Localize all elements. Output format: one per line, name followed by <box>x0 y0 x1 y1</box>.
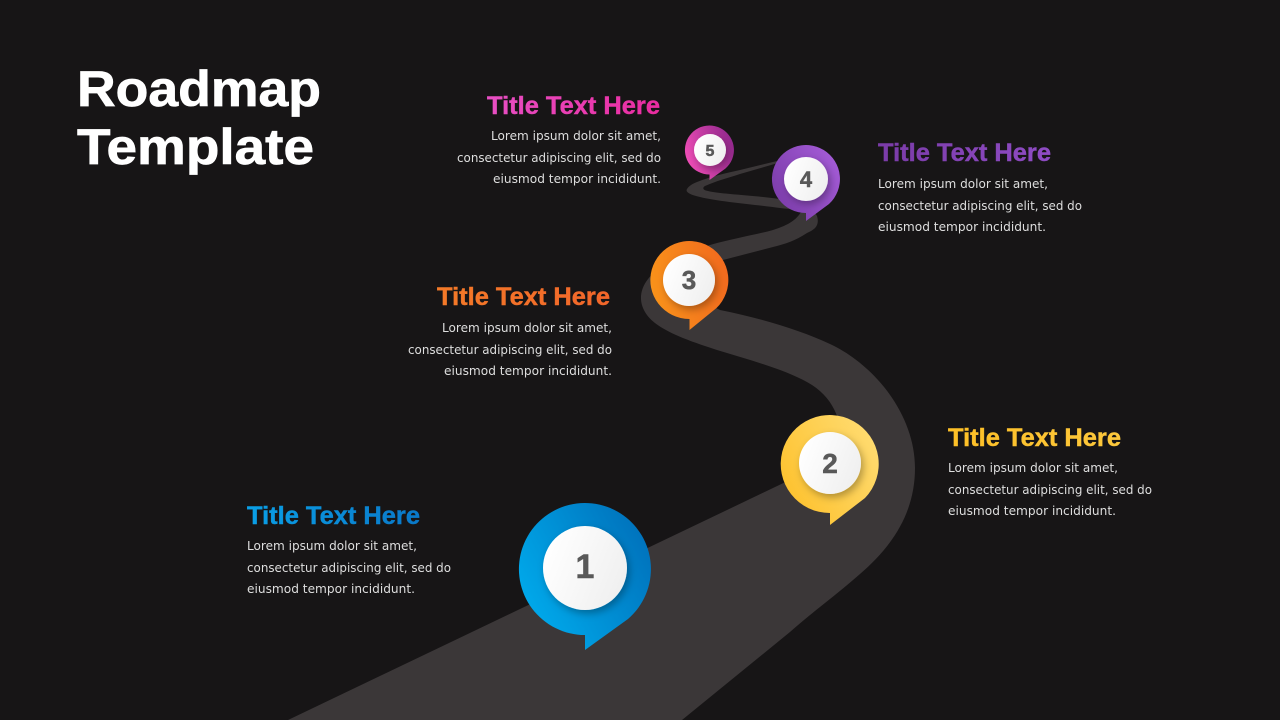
body: step 4: eiusmod tempor incididunt. <box>878 220 1046 234</box>
pin 1: 1 <box>576 548 594 586</box>
step 1 text block <box>247 502 451 596</box>
pin 4 <box>772 145 840 221</box>
body: step 3: consectetur adipiscing elit, sed do <box>408 343 612 357</box>
heading: step 4: Title Text Here <box>878 139 1051 167</box>
main title: Template <box>77 119 314 175</box>
heading: step 5: Title Text Here <box>487 92 660 120</box>
body: step 1: consectetur adipiscing elit, sed do <box>247 561 451 575</box>
body: step 1: Lorem ipsum dolor sit amet, <box>247 539 417 553</box>
body: step 2: consectetur adipiscing elit, sed do <box>948 483 1152 497</box>
body: step 3: eiusmod tempor incididunt. <box>444 364 612 378</box>
body: step 3: Lorem ipsum dolor sit amet, <box>442 321 612 335</box>
step 5 text block <box>457 92 661 186</box>
body: step 4 <box>878 177 1082 234</box>
heading: step 1: Title Text Here <box>247 502 420 530</box>
heading: step 2: Title Text Here <box>948 424 1121 452</box>
step 4 text block <box>878 139 1082 234</box>
body: step 2 <box>948 461 1152 518</box>
main title: Roadmap <box>77 61 321 117</box>
winding road <box>288 161 915 720</box>
pin 5: 5 <box>706 143 715 160</box>
body: step 2: Lorem ipsum dolor sit amet, <box>948 461 1118 475</box>
heading: step 3: Title Text Here <box>437 283 610 311</box>
step 2 text block <box>948 424 1152 518</box>
body: step 4: Lorem ipsum dolor sit amet, <box>878 177 1048 191</box>
pin 3 <box>650 241 728 330</box>
body: step 5: consectetur adipiscing elit, sed do <box>457 151 661 165</box>
pin 2: 2 <box>822 448 838 479</box>
body: step 2: eiusmod tempor incididunt. <box>948 504 1116 518</box>
pin 1 <box>519 503 651 650</box>
pin 2 <box>781 415 879 525</box>
pin 3: 3 <box>682 265 696 295</box>
body: step 3 <box>408 321 612 378</box>
pin 5 <box>685 126 734 180</box>
body: step 5: Lorem ipsum dolor sit amet, <box>491 129 661 143</box>
pin 4: 4 <box>800 167 813 192</box>
body: step 4: consectetur adipiscing elit, sed do <box>878 199 1082 213</box>
main title <box>77 61 321 175</box>
body: step 1 <box>247 539 451 596</box>
body: step 5 <box>457 129 661 186</box>
body: step 1: eiusmod tempor incididunt. <box>247 582 415 596</box>
body: step 5: eiusmod tempor incididunt. <box>493 172 661 186</box>
step 3 text block <box>408 283 612 378</box>
